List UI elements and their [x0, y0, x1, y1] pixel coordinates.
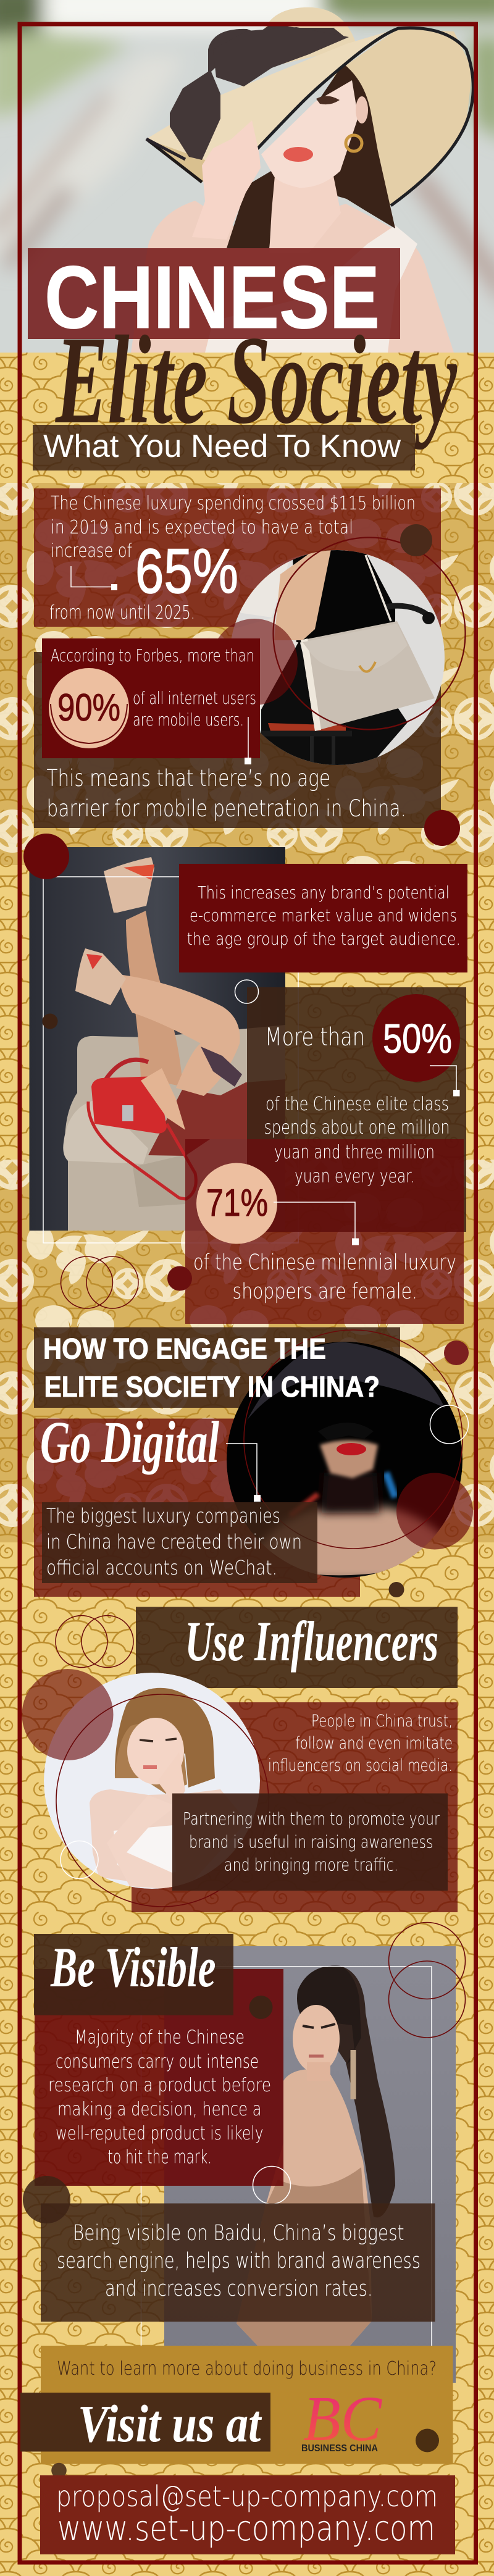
rose circle [22, 1669, 114, 1760]
dot top left [23, 834, 69, 879]
stat: 90% [49, 668, 129, 748]
stat: 71%: 71% [206, 1182, 268, 1224]
stat: 71% [196, 1163, 277, 1244]
text: 71 percent statistic [193, 1163, 456, 1304]
logo: Business China: BUSINESS CHINA [301, 2443, 378, 2454]
face [320, 1440, 378, 1478]
panel: go digital [34, 1419, 360, 1597]
heading: how to engage: ELITE SOCIETY IN CHINA? [44, 1370, 380, 1403]
panel: Forbes statistic: are mobile users. [133, 709, 244, 730]
panel: Baidu [41, 2203, 435, 2322]
panel: Baidu: Being visible on Baidu, China’s biggest [73, 2221, 404, 2246]
text box: partnering [172, 1793, 448, 1891]
panel: Forbes statistic [42, 638, 260, 764]
ring pair [56, 1615, 133, 1667]
neck [269, 177, 340, 246]
background: flower pattern upper band [0, 483, 494, 865]
panel: luxury spending: from now until 2025. [49, 602, 195, 624]
heading: Go Digital: Go Digital [40, 1409, 219, 1475]
text: 50 percent statistic: More than [265, 1023, 365, 1052]
text: 71 percent statistic: shoppers are female. [232, 1279, 417, 1304]
text: no age barrier: barrier for mobile penetration in China. [47, 795, 406, 822]
panel: call to action [20, 2346, 453, 2464]
panel: contact [40, 2475, 455, 2554]
stat: 65%: 65% [135, 536, 238, 606]
white frame [141, 1967, 432, 2362]
stat: 50%: 50% [383, 1016, 452, 1062]
heading: how to engage: HOW TO ENGAGE THE [43, 1332, 326, 1365]
text: 50 percent statistic [264, 994, 460, 1187]
long hair [298, 1966, 395, 2217]
photo: handbag [230, 550, 445, 765]
panel: research: Majority of the Chinese [75, 2026, 245, 2049]
body [237, 2069, 372, 2346]
earring [346, 135, 362, 151]
heading: Use Influencers [136, 1607, 458, 1688]
stat: 90%: 90% [57, 687, 120, 729]
text box: WeChat: official accounts on WeChat. [46, 1556, 277, 1579]
panel: 71 percent [185, 1139, 464, 1324]
connector [430, 1066, 459, 1097]
small brown dot [42, 1014, 58, 1029]
panel: e-commerce value [179, 864, 467, 972]
leg behind [126, 911, 183, 1087]
ring pair [389, 1923, 466, 2038]
panel: influencers trust: People in China trust, [311, 1712, 453, 1731]
heading: Visit us at [20, 2393, 270, 2453]
heading: Be Visible: Be Visible [50, 1936, 216, 1999]
hand [192, 120, 261, 240]
heading panel: how to engage [34, 1328, 400, 1408]
decorative circles around black hat [244, 1330, 473, 1550]
panel: Forbes statistic: of all internet users [133, 688, 256, 708]
face [261, 80, 358, 188]
connector [71, 566, 117, 590]
leg in front [119, 974, 240, 1096]
heading: Visit us at: Visit us at [78, 2394, 262, 2453]
text: 50 percent statistic: of the Chinese elite class [266, 1094, 449, 1115]
heading: Be Visible [34, 1934, 233, 2015]
neck [321, 1473, 380, 1513]
white photo frame [43, 877, 298, 1243]
text box: partnering: and bringing more traffic. [224, 1855, 398, 1875]
shoe lower [75, 948, 126, 1005]
panel: Forbes statistic: According to Forbes, more than [51, 645, 254, 666]
panel: research: consumers carry out intense [56, 2051, 259, 2073]
panel: contact: proposal@set-up-company.com [56, 2480, 438, 2513]
panel: 50 percent [247, 987, 466, 1232]
hat ribbon [170, 23, 346, 160]
dot [51, 2463, 67, 2478]
shoulders [241, 1507, 460, 1581]
dress [205, 225, 417, 353]
panel: research: making a decision, hence a [57, 2099, 262, 2120]
lips [337, 1443, 366, 1455]
text: 50 percent statistic: spends about one million [264, 1117, 450, 1139]
ring [56, 1694, 269, 1907]
small white ring [235, 980, 258, 1003]
panel: luxury spending: increase of [51, 540, 132, 562]
shoe top [104, 857, 154, 913]
stat: 50% [372, 994, 460, 1082]
text box: WeChat: The biggest luxury companies [46, 1504, 280, 1528]
photo: influencer [44, 1673, 260, 1889]
dot [424, 810, 460, 846]
panel: Baidu: and increases conversion rates. [105, 2277, 373, 2301]
text box: partnering: brand is useful in raising awareness [189, 1831, 433, 1852]
photo: woman with earrings [164, 1946, 456, 2383]
panel: research: well-reputed product is likely [56, 2123, 263, 2144]
brown dot [23, 2176, 70, 2223]
logo: Business China: BC [303, 2383, 383, 2454]
panel: luxury spending [34, 488, 441, 627]
hair [227, 64, 395, 248]
connector [226, 1444, 261, 1502]
dot [249, 1996, 273, 2019]
heading: how to engage [43, 1332, 380, 1403]
panel: influencers trust: follow and even imitate [295, 1734, 453, 1753]
dot [389, 1582, 404, 1597]
panel: mobile penetration [34, 652, 441, 828]
background: flower pattern lower band [0, 1160, 494, 1542]
body and shoulders [131, 201, 454, 353]
panel: luxury spending: in 2019 and is expected to have a total [51, 517, 353, 538]
subtitle: What You Need To Know [43, 429, 401, 464]
panel: influencers trust [132, 1702, 458, 1912]
photo: woman in straw hat [0, 0, 494, 353]
dot [416, 2429, 439, 2453]
small white ring [61, 1841, 98, 1878]
text: no age barrier: This means that there’s no age [47, 765, 330, 792]
title: Chinese: CHINESE [44, 248, 380, 347]
text box: WeChat [42, 1502, 317, 1583]
hat brim underside [333, 28, 472, 206]
photo: woman in black hat [227, 1342, 463, 1581]
text: no age barrier [47, 765, 406, 822]
hat crown [264, 7, 355, 64]
dot [167, 1266, 192, 1290]
text: 50 percent statistic: yuan every year. [295, 1166, 415, 1187]
white ring [253, 2166, 290, 2204]
hat brim top [146, 28, 398, 162]
ring pair [61, 1257, 138, 1308]
panel: research [35, 1969, 283, 2186]
lips [283, 147, 313, 162]
connector [274, 1202, 359, 1245]
connector [245, 717, 251, 764]
decorative circles around handbag [211, 524, 466, 730]
text box: WeChat: in China have created their own [46, 1530, 302, 1554]
panel: research: research on a product before [48, 2075, 271, 2096]
panel: research: to hit the mark. [107, 2147, 212, 2168]
photo: legs and red handbag [29, 847, 285, 1231]
text: 50 percent statistic: yuan and three million [274, 1142, 435, 1163]
